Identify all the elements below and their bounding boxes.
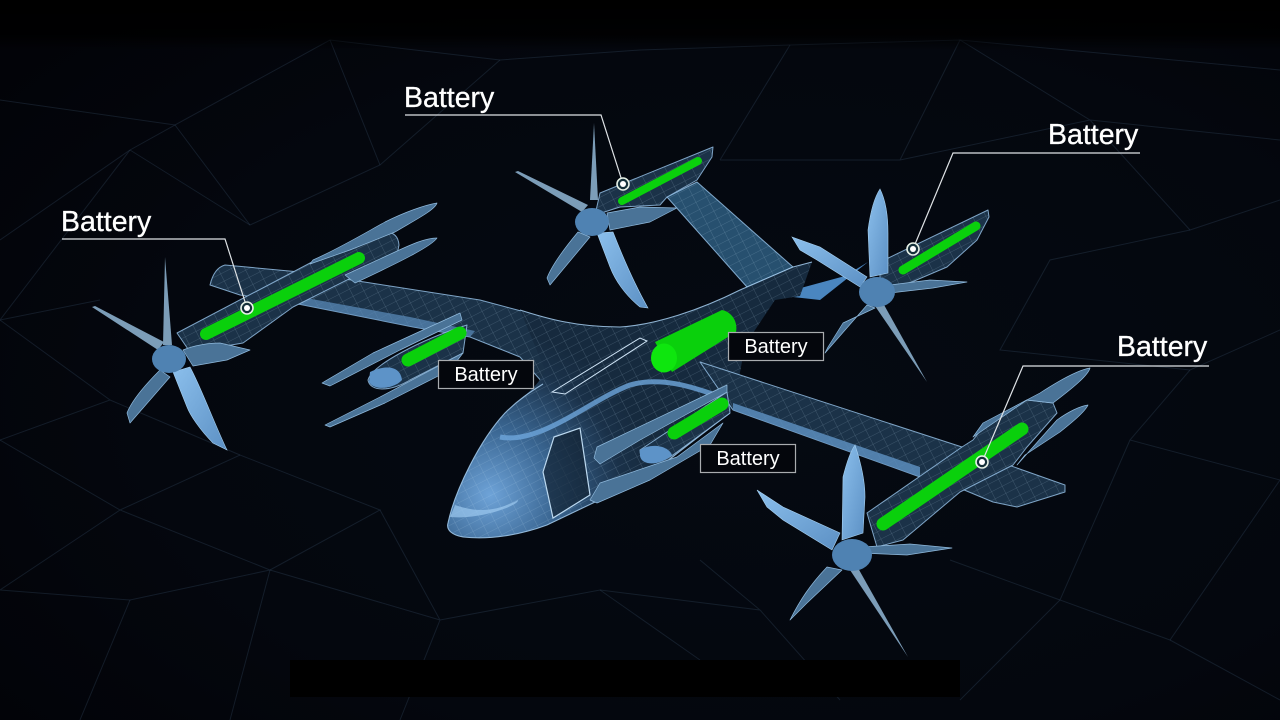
fuselage xyxy=(448,262,812,538)
aircraft xyxy=(92,123,1090,657)
battery: inner right pod xyxy=(674,404,722,433)
callout: Battery left: Battery xyxy=(61,206,152,238)
right wing xyxy=(700,362,1065,507)
green batteries xyxy=(206,161,1022,524)
callout: Battery upper right: Battery xyxy=(1048,119,1139,151)
battery: rear right pod xyxy=(903,226,976,270)
callout: Battery upper right xyxy=(907,119,1140,255)
callout: Battery lower right xyxy=(976,331,1209,468)
left wing xyxy=(210,265,555,383)
callout: Battery lower right: Battery xyxy=(1117,331,1208,363)
callout: Battery top xyxy=(404,82,629,190)
battery: rear centre pod xyxy=(622,161,698,201)
cabin windows xyxy=(543,428,590,518)
nose band xyxy=(450,500,518,517)
propeller 2 xyxy=(515,123,677,308)
propeller 1 xyxy=(92,257,250,450)
callout: Battery left xyxy=(61,206,253,314)
top dark band xyxy=(0,0,1280,50)
boxed label: fuselage: Battery xyxy=(744,336,808,358)
battery: fuselage xyxy=(651,310,736,372)
tail strip xyxy=(775,262,868,300)
rotor pod: rear centre xyxy=(595,147,713,215)
dorsal panel xyxy=(552,338,647,394)
boxed label: fuselage xyxy=(728,332,824,360)
battery: inner left pod xyxy=(408,333,460,360)
inner pod: right xyxy=(590,385,730,503)
battery: front right pod xyxy=(883,429,1022,524)
inner pod: left xyxy=(322,313,467,427)
bottom black band xyxy=(290,660,960,697)
boxed label: inner right xyxy=(700,444,796,472)
boxed label: inner left xyxy=(438,360,534,388)
fuselage outline xyxy=(448,262,812,538)
propeller 4 xyxy=(757,445,952,657)
boxed label: inner right: Battery xyxy=(716,448,780,470)
boxed label: inner left: Battery xyxy=(454,364,518,386)
callout: Battery top: Battery xyxy=(404,82,495,114)
rotor pod: rear left xyxy=(177,203,437,352)
rotor pod: rear right xyxy=(880,210,989,295)
rear wing xyxy=(667,182,793,287)
propeller 3 xyxy=(792,189,967,382)
cabin arch xyxy=(500,382,730,438)
rotor pod: front right xyxy=(867,368,1090,547)
battery: rear left pod xyxy=(206,258,359,334)
